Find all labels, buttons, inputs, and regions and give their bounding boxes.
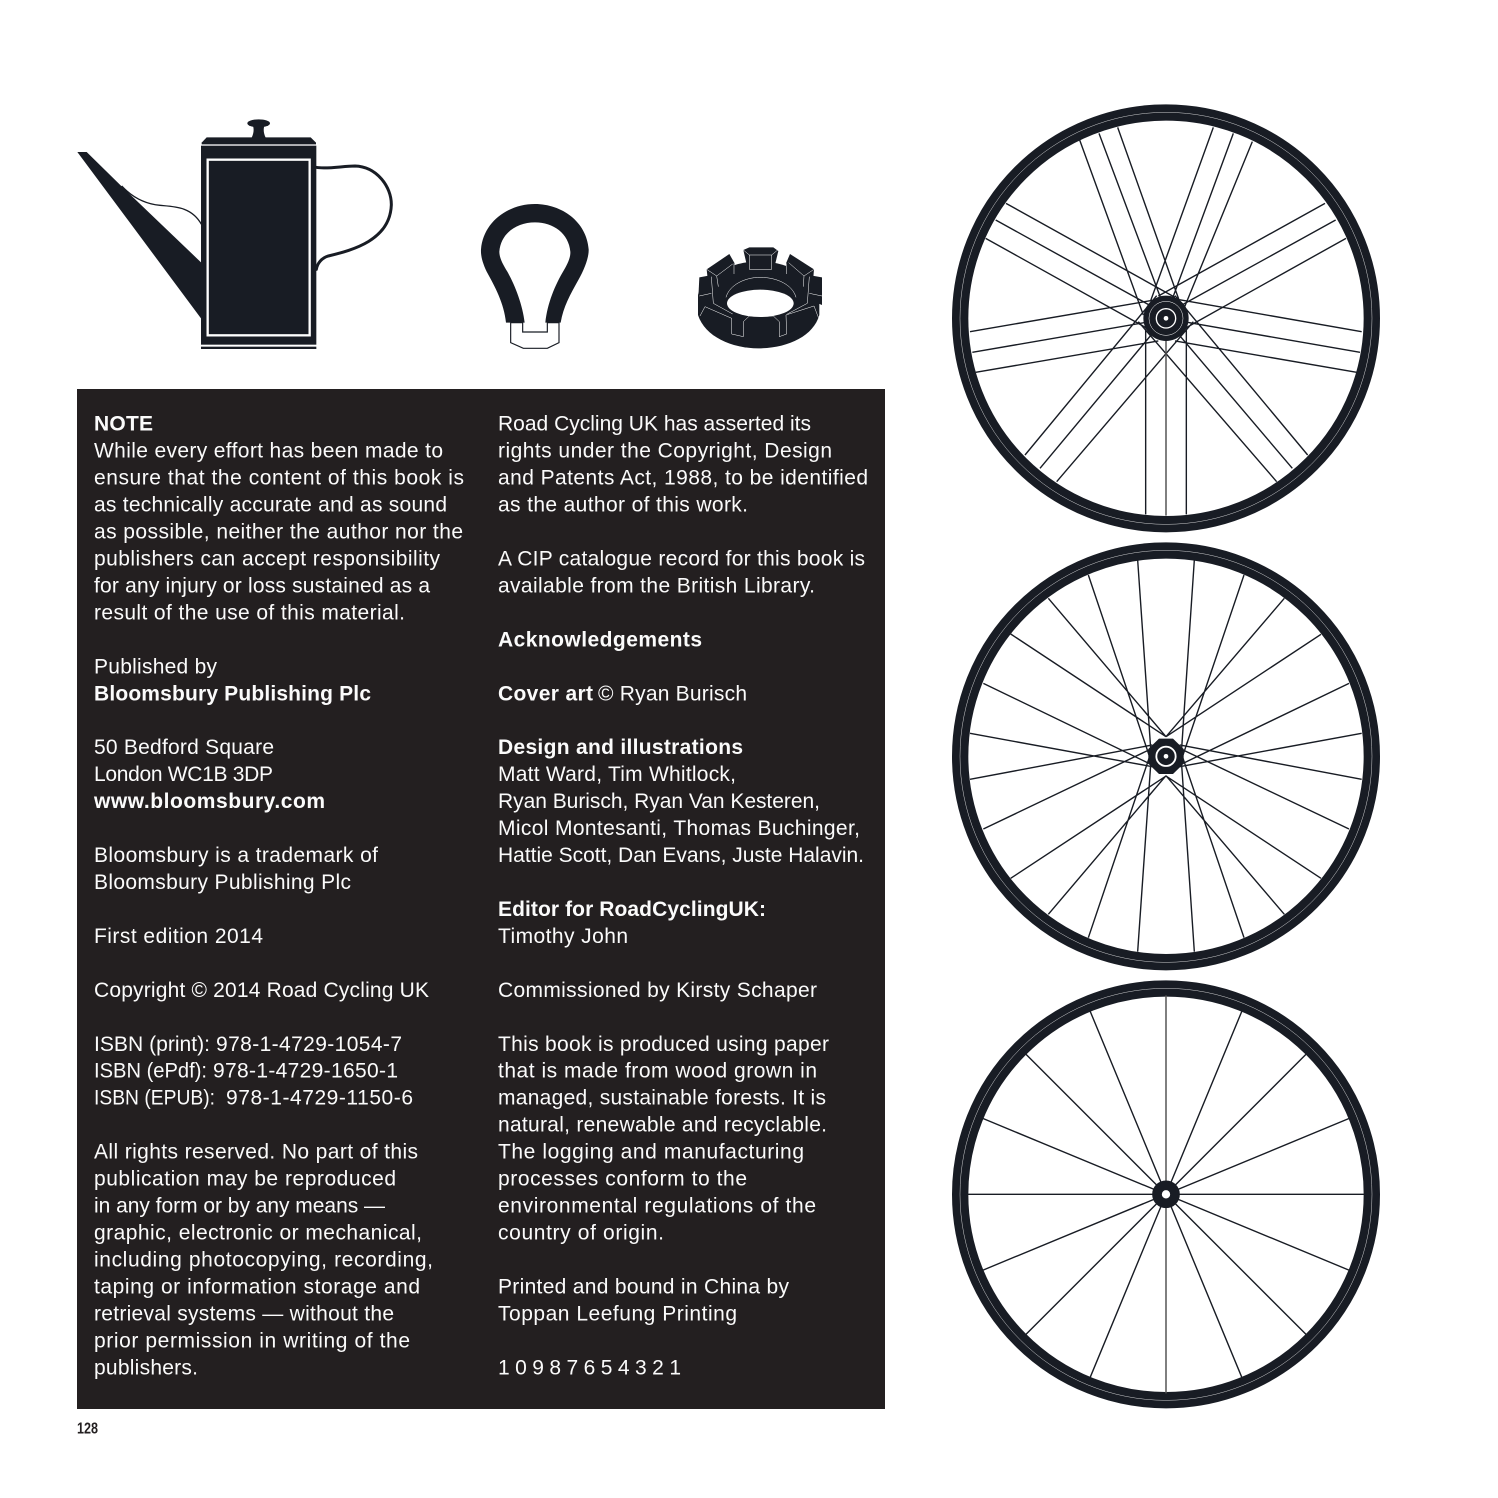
text: left column: 978-1-4729-1650-1 (213, 1060, 398, 1083)
text: left column: Bloomsbury is a trademark of (94, 844, 378, 867)
text: left column: 978-1-4729-1150-6 (226, 1087, 413, 1110)
text: left column: ensure that the content of this book is (94, 467, 464, 490)
wheel: crossed spokes (960, 550, 1372, 962)
icon: lockring tool (698, 247, 822, 348)
text: left column: as technically accurate and as sound (94, 494, 447, 517)
text: right column: Printed and bound in China by (498, 1275, 790, 1298)
text: right column: Toppan Leefung Printing (498, 1302, 737, 1325)
text: left column: While every effort has been made to (94, 440, 443, 463)
text: left column: All rights reserved. No part of this (94, 1141, 418, 1164)
text: left column (93, 413, 464, 1379)
text: left column: Published by (94, 655, 218, 678)
icon: spoke wrench (481, 204, 589, 348)
text: right column: available from the British Library. (498, 574, 815, 598)
text: right column: Road Cycling UK has asserted its (498, 413, 811, 436)
text: right column: environmental regulations of the (498, 1194, 816, 1218)
text: right column: Matt Ward, Tim Whitlock, (498, 763, 736, 786)
text: right column: country of origin. (498, 1222, 664, 1244)
text: left column: including photocopying, recording, (94, 1248, 433, 1272)
text: right column: Ryan Burisch, Ryan Van Kesteren, (498, 790, 820, 813)
text: right column: rights under the Copyright, Design (498, 440, 832, 463)
text: left column: publishers can accept responsibility (94, 548, 440, 570)
text: right column: managed, sustainable forests. It is (498, 1087, 826, 1110)
text: left column: www.bloomsbury.com (93, 790, 325, 813)
text: right column: Timothy John (498, 925, 628, 948)
text: right column: natural, renewable and recyclable. (498, 1114, 827, 1137)
wheel: three-spoke groups (960, 112, 1372, 524)
text: left column: 978-1-4729-1054-7 (216, 1033, 402, 1056)
text: right column: Design and illustrations (498, 736, 743, 759)
text: left column: prior permission in writing of the (94, 1329, 410, 1352)
text: right column (498, 413, 868, 1379)
text: left column: result of the use of this material. (94, 601, 405, 624)
text: left column: publication may be reproduced (94, 1168, 396, 1191)
text: left column: ISBN (ePdf): (94, 1060, 207, 1083)
text: left column: taping or information storage and (94, 1275, 420, 1298)
text: right column: Editor for RoadCyclingUK: (498, 898, 766, 921)
icon: coffee pot (77, 119, 391, 349)
text: left column: as possible, neither the author nor the (94, 520, 463, 544)
text: right column: The logging and manufacturing (498, 1141, 804, 1164)
text: right column: Acknowledgements (498, 628, 702, 651)
text: left column: First edition 2014 (94, 925, 263, 948)
text: right column: A CIP catalogue record for this book is (498, 548, 865, 570)
wheel: radial spokes (960, 988, 1372, 1400)
text: left column: Bloomsbury Publishing Plc (94, 871, 351, 894)
text: left column: London WC1B 3DP (94, 763, 273, 786)
text: right column: This book is produced using paper (498, 1033, 829, 1056)
text: left column: 50 Bedford Square (94, 736, 274, 759)
text: left column: NOTE (94, 413, 153, 436)
text: left column: ISBN (print): (94, 1033, 210, 1056)
text: left column: for any injury or loss sustained as a (94, 574, 430, 598)
text: left column: in any form or by any means — (94, 1194, 385, 1218)
text: left column: graphic, electronic or mechanical, (94, 1222, 422, 1244)
text: left column: retrieval systems — without the (94, 1302, 394, 1325)
text: right column: and Patents Act, 1988, to be identified (498, 467, 868, 490)
text: right column: processes conform to the (498, 1168, 747, 1191)
text: right column: © Ryan Burisch (598, 682, 747, 705)
text: right column: that is made from wood grown in (498, 1060, 817, 1083)
text: right column: Cover art (498, 682, 593, 705)
text: left column: Bloomsbury Publishing Plc (94, 682, 371, 705)
page number: 128 (77, 1420, 98, 1438)
text: left column: ISBN (EPUB): (94, 1087, 215, 1110)
text: left column: Copyright © 2014 Road Cycling UK (94, 979, 429, 1002)
text: left column: publishers. (94, 1356, 198, 1379)
text: right column: as the author of this work. (498, 494, 748, 517)
text: right column: Commissioned by Kirsty Schaper (498, 979, 817, 1002)
text: right column: Hattie Scott, Dan Evans, Juste Halavin. (498, 844, 864, 867)
text: right column: 1 0 9 8 7 6 5 4 3 2 1 (498, 1356, 681, 1379)
text: right column: Micol Montesanti, Thomas Buchinger, (498, 817, 860, 840)
panel: imprint (77, 389, 885, 1409)
